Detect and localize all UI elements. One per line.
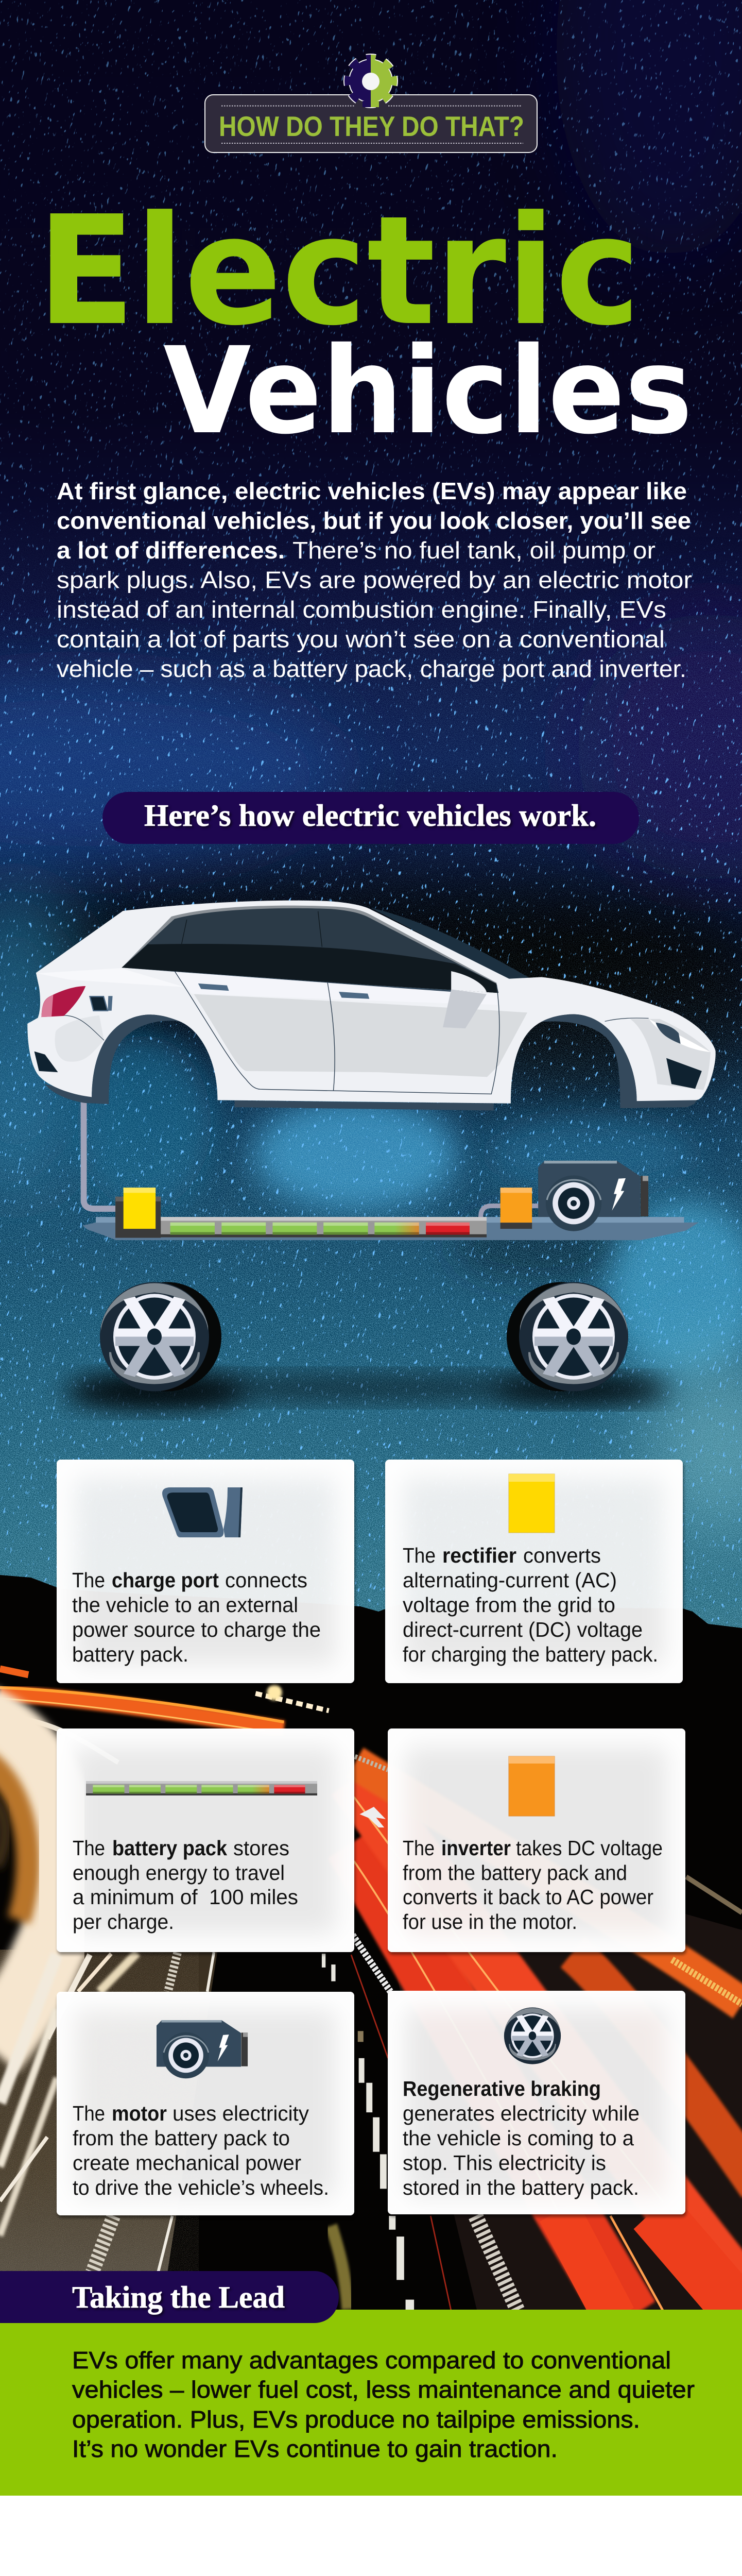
icon: inverter bbox=[509, 1756, 555, 1816]
card: rectifier bbox=[385, 1460, 684, 1686]
intro paragraph: instead of an internal combustion engine. Finally, EVs bbox=[57, 596, 666, 623]
conclusion text bbox=[72, 2347, 695, 2462]
badge text: HOW DO THEY DO THAT? bbox=[219, 110, 524, 142]
battery pack text: stores bbox=[233, 1836, 289, 1860]
intro paragraph: conventional vehicles, but if you look closer, you’ll see bbox=[57, 507, 691, 534]
rear wheel bbox=[100, 1282, 221, 1391]
icon: rectifier bbox=[509, 1474, 555, 1533]
charge port text: battery pack. bbox=[72, 1642, 188, 1666]
rectifier text: rectifier bbox=[442, 1544, 516, 1567]
inverter text: inverter bbox=[441, 1836, 511, 1860]
car charge port bbox=[90, 996, 113, 1011]
charge port text: connects bbox=[225, 1568, 307, 1592]
charge port text bbox=[72, 1568, 321, 1666]
intro paragraph: At first glance, electric vehicles (EVs) may appear like bbox=[57, 478, 687, 504]
regenerative braking text: generates electricity while bbox=[403, 2102, 640, 2125]
battery pack bbox=[161, 1217, 487, 1238]
conclusion heading: Taking the Lead bbox=[0, 2271, 339, 2323]
battery pack text: enough energy to travel bbox=[73, 1861, 285, 1885]
battery pack text: per charge. bbox=[73, 1910, 174, 1934]
motor bbox=[538, 1161, 648, 1231]
section heading pill: Here’s how electric vehicles work. bbox=[144, 799, 596, 833]
rectifier text: converts bbox=[523, 1544, 601, 1567]
intro paragraph: vehicle – such as a battery pack, charge port and inverter. bbox=[57, 655, 686, 682]
motor text: to drive the vehicle’s wheels. bbox=[73, 2176, 329, 2199]
icon: battery bbox=[86, 1781, 317, 1795]
wires bbox=[481, 1206, 547, 1217]
regenerative braking text bbox=[403, 2077, 640, 2199]
inverter text: The bbox=[403, 1836, 435, 1860]
title: Electric Vehicles: Vehicles bbox=[163, 321, 693, 461]
intro paragraph: contain a lot of parts you won’t see on a conventional bbox=[57, 625, 665, 652]
inverter text: from the battery pack and bbox=[403, 1861, 627, 1885]
title: Electric Vehicles bbox=[37, 183, 693, 461]
section heading pill bbox=[102, 792, 639, 844]
rear reflector bbox=[34, 1052, 58, 1072]
inverter text bbox=[403, 1836, 663, 1934]
inverter text: for use in the motor. bbox=[403, 1910, 577, 1934]
regenerative braking text: stored in the battery pack. bbox=[403, 2176, 639, 2199]
card: motor bbox=[57, 1992, 355, 2218]
icon: gear bbox=[343, 53, 399, 109]
windows bbox=[122, 906, 498, 993]
panel: conclusion bbox=[0, 2271, 742, 2496]
conclusion text: EVs offer many advantages compared to conventional bbox=[72, 2347, 671, 2374]
regenerative braking text: Regenerative braking bbox=[403, 2077, 601, 2100]
front wheel bbox=[507, 1282, 628, 1391]
conclusion text: vehicles – lower fuel cost, less maintenance and quieter bbox=[72, 2376, 695, 2403]
regenerative braking text: stop. This electricity is bbox=[403, 2151, 606, 2175]
battery pack text bbox=[73, 1836, 298, 1934]
front grille bbox=[666, 1058, 702, 1089]
highway light trails background bbox=[0, 1575, 742, 2318]
series badge: How Do They Do That? bbox=[205, 53, 537, 152]
rectifier text: The bbox=[403, 1544, 436, 1567]
car body bbox=[27, 901, 716, 1111]
rectifier text: voltage from the grid to bbox=[403, 1593, 615, 1617]
motor text: The bbox=[73, 2102, 105, 2125]
rectifier text bbox=[403, 1544, 658, 1666]
rectifier bbox=[115, 1188, 161, 1238]
card: battery pack bbox=[57, 1728, 355, 1955]
battery pack text: battery pack bbox=[112, 1836, 227, 1860]
charge port text: the vehicle to an external bbox=[72, 1593, 298, 1617]
rectifier text: direct-current (DC) voltage bbox=[403, 1618, 643, 1641]
conclusion text: It’s no wonder EVs continue to gain traction. bbox=[72, 2435, 558, 2462]
regenerative braking text: the vehicle is coming to a bbox=[403, 2126, 634, 2150]
rectifier text: for charging the battery pack. bbox=[403, 1642, 658, 1666]
battery pack text: The bbox=[73, 1836, 105, 1860]
rectifier text: alternating-current (AC) bbox=[403, 1568, 617, 1592]
card: charge port bbox=[57, 1460, 355, 1686]
charge port text: The bbox=[72, 1568, 105, 1592]
title: Electric Vehicles: Electric bbox=[37, 183, 641, 359]
tail light bbox=[41, 986, 85, 1017]
starry night sky background bbox=[0, 0, 742, 1628]
conclusion text: operation. Plus, EVs produce no tailpipe emissions. bbox=[72, 2406, 640, 2433]
exploded EV diagram bbox=[27, 901, 716, 1410]
motor text: motor bbox=[112, 2102, 167, 2125]
motor text: create mechanical power bbox=[73, 2151, 301, 2175]
charging cable bbox=[84, 1100, 116, 1209]
intro paragraph: There’s no fuel tank, oil pump or bbox=[292, 537, 655, 564]
card: regenerative braking bbox=[388, 1991, 686, 2217]
intro paragraph bbox=[57, 478, 692, 682]
intro paragraph: a lot of differences. bbox=[57, 537, 285, 564]
icon: charge port bbox=[162, 1487, 243, 1537]
motor text bbox=[73, 2102, 329, 2199]
card: inverter bbox=[388, 1728, 686, 1955]
motor text: uses electricity bbox=[172, 2102, 309, 2125]
ground shadow bbox=[64, 1375, 669, 1410]
battery pack text: a minimum of 100 miles bbox=[73, 1885, 298, 1909]
motor text: from the battery pack to bbox=[73, 2126, 290, 2150]
headlight bbox=[655, 1023, 681, 1044]
charge port text: power source to charge the bbox=[72, 1618, 321, 1641]
inverter text: takes DC voltage bbox=[516, 1836, 663, 1860]
door details bbox=[64, 971, 649, 1094]
conclusion heading: Taking the Lead: Taking the Lead bbox=[72, 2280, 285, 2314]
icon: motor bbox=[157, 2020, 248, 2078]
chassis platform bbox=[83, 1217, 699, 1240]
intro paragraph: spark plugs. Also, EVs are powered by an electric motor bbox=[57, 567, 692, 594]
icon: wheel bbox=[504, 2007, 561, 2064]
inverter text: converts it back to AC power bbox=[403, 1885, 653, 1909]
charge port text: charge port bbox=[112, 1568, 219, 1592]
inverter bbox=[501, 1188, 532, 1229]
